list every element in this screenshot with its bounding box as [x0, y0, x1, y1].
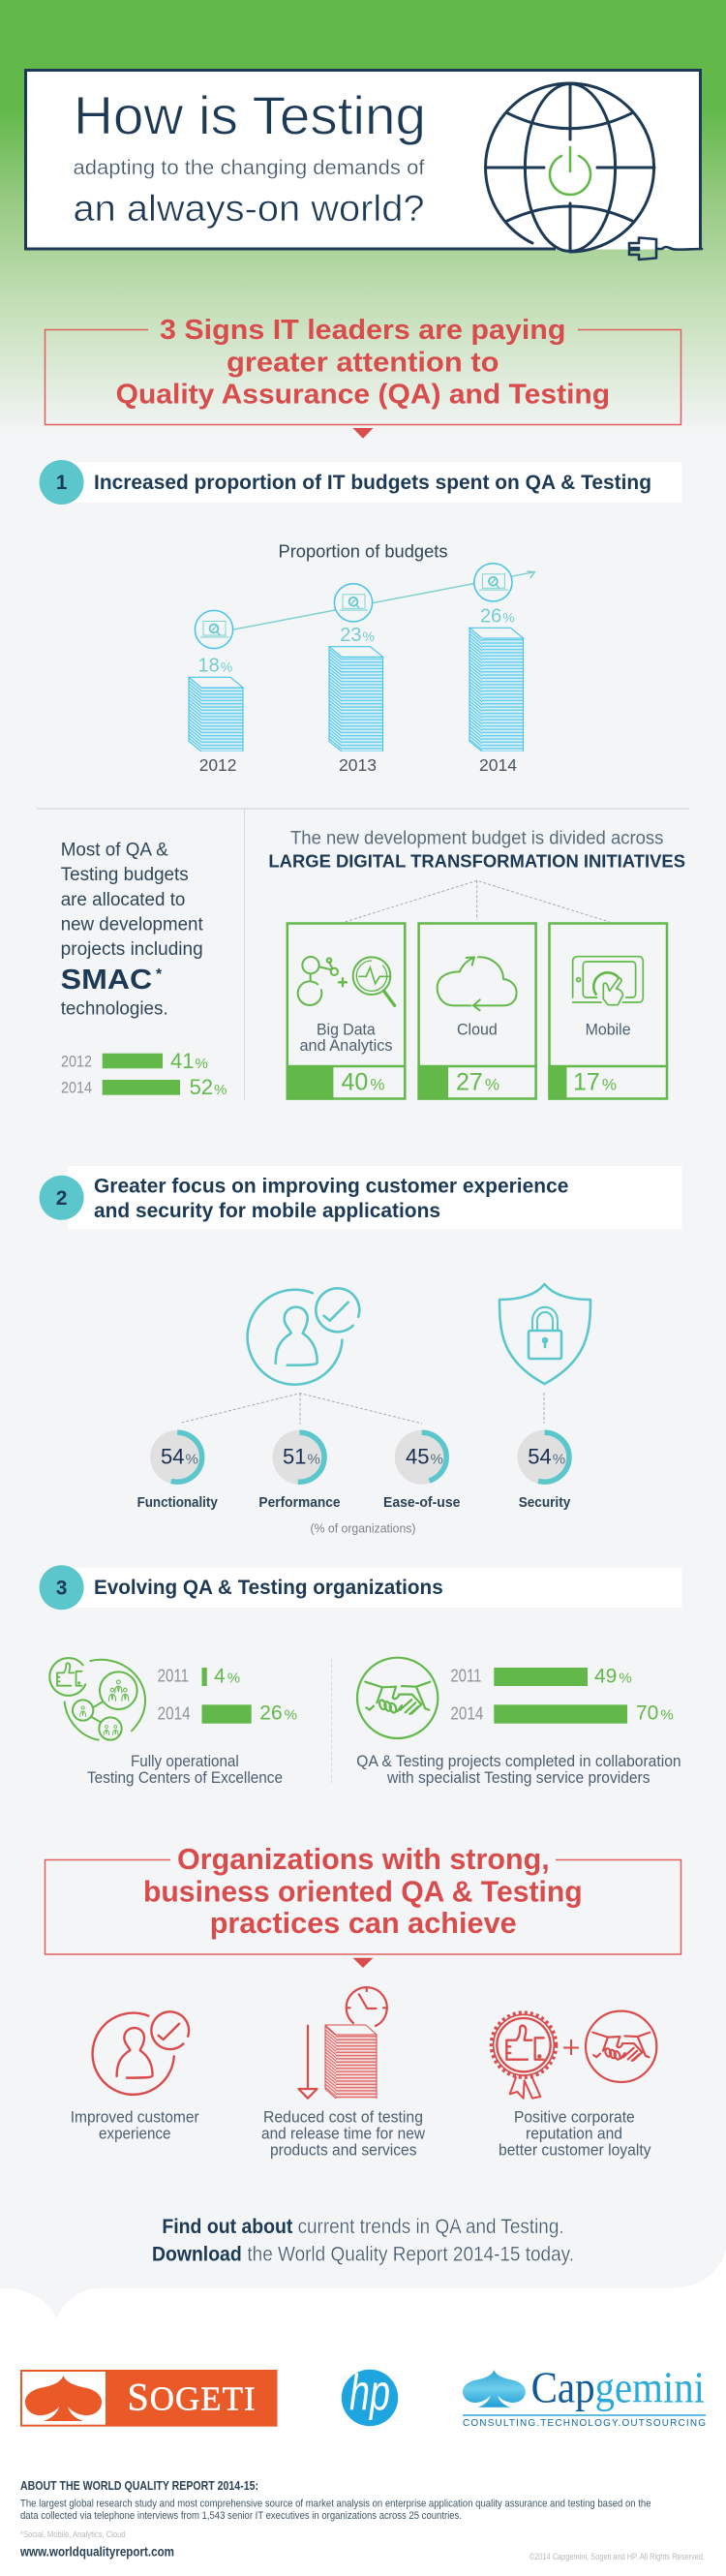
panel: organizations callout — [45, 1842, 681, 1968]
logo: Sogeti: SOGETI — [128, 2376, 257, 2419]
text block: SMAC allocation — [61, 840, 203, 1020]
panel: Big Data and Analytics: Big Data — [317, 1020, 376, 1038]
caption: reduced cost: products and services — [270, 2141, 416, 2160]
donut: performance 51%: 51% — [283, 1445, 320, 1469]
caption: corporate reputation: better customer loyalty — [499, 2141, 651, 2160]
heading: 3 signs: Quality Assurance (QA) and Testing — [116, 380, 610, 411]
icon: handshake red — [586, 2011, 656, 2082]
donut: ease-of-use 45% — [395, 1430, 449, 1485]
panel: section 2 header — [40, 1166, 682, 1229]
icon: plug and cord — [629, 238, 702, 260]
caption: improved customer experience: experience — [99, 2124, 170, 2142]
caption: corporate reputation: reputation and — [526, 2124, 622, 2142]
heading: development budget: LARGE DIGITAL TRANSFORMATION INITIATIVES — [268, 851, 685, 871]
note: percent of organizations: (% of organizations) — [310, 1522, 416, 1536]
title line 1: How is Testing — [74, 85, 426, 145]
heading: organizations: practices can achieve — [210, 1906, 517, 1940]
title line 3: an always-on world? — [74, 189, 424, 230]
donut labels: Ease-of-use — [383, 1494, 460, 1511]
caption: reduced cost: and release time for new — [261, 2124, 426, 2142]
year labels: 2012 — [199, 755, 236, 775]
bar chart: SMAC share: 2014 — [61, 1078, 92, 1096]
stack 2012 — [189, 677, 243, 751]
icon: customer with check — [248, 1288, 359, 1385]
panel: Big Data and Analytics — [287, 924, 407, 1100]
panel: Big Data and Analytics: 40% — [341, 1068, 384, 1095]
icon: cloud — [438, 957, 517, 1010]
donut labels: Security — [519, 1494, 571, 1511]
text block: SMAC allocation: SMAC — [61, 965, 152, 996]
logo: Capgemini: gemini — [595, 2362, 705, 2411]
heading: organizations: business oriented QA & Testing — [143, 1874, 583, 1908]
caption: improved customer experience — [71, 2108, 199, 2142]
title line 2: adapting to the changing demands of — [74, 157, 425, 179]
year labels: 2013 — [339, 755, 377, 775]
icon: shield with padlock — [499, 1284, 590, 1384]
text block: about the report — [20, 2478, 650, 2522]
heading: 3 signs: greater attention to — [227, 347, 499, 378]
bar chart: collaboration: 70% — [636, 1702, 674, 1725]
text block: SMAC allocation: are allocated to — [61, 890, 185, 910]
caption: testing centers — [87, 1752, 283, 1787]
text block: SMAC allocation: * — [156, 966, 163, 983]
icon: laptop 2014 — [474, 564, 512, 601]
panel: section 2 header: 2 — [56, 1187, 67, 1210]
heading: development budget — [268, 829, 685, 871]
text block: about the report: The largest global research study and most comprehensive source of market analysis on enterprise application quality assurance and testing based on the — [20, 2498, 650, 2509]
panel: Cloud: Cloud — [457, 1020, 498, 1038]
panel: section 2 header: Greater focus on improving customer experience — [94, 1176, 568, 1198]
donut labels — [137, 1494, 571, 1511]
donut: security 54% — [517, 1430, 571, 1485]
dividers — [37, 808, 689, 810]
call to action — [152, 2216, 574, 2265]
green header gradient — [0, 0, 726, 436]
donut labels: Functionality — [137, 1494, 218, 1511]
bar chart: SMAC share: 41% — [170, 1049, 208, 1073]
donut: performance 51% — [273, 1430, 327, 1485]
dashed connectors — [182, 1393, 544, 1425]
caption: improved customer experience: Improved customer — [71, 2108, 199, 2127]
caption: reduced cost — [261, 2108, 426, 2160]
arrow: trend line — [234, 571, 534, 629]
value 23%: 23% — [340, 625, 375, 646]
bar chart: collaboration: 2011 — [450, 1667, 481, 1686]
bar chart: testing centers: 26% — [259, 1702, 297, 1725]
panel: Cloud: 27% — [456, 1068, 499, 1095]
caption: testing centers: Testing Centers of Excellence — [87, 1768, 283, 1787]
call to action: current trends in QA and Testing. — [298, 2216, 564, 2238]
website link text: www.worldqualityreport.com — [19, 2543, 174, 2559]
logo: Capgemini: CONSULTING.TECHNOLOGY.OUTSOURCING — [463, 2418, 706, 2429]
icon: testing centers of excellence — [49, 1658, 145, 1740]
call to action: the World Quality Report 2014-15 today. — [247, 2243, 574, 2265]
dashed connectors — [345, 880, 610, 922]
caption: testing centers: Fully operational — [131, 1752, 239, 1770]
icon: plus — [563, 2039, 579, 2055]
panel: Mobile — [548, 924, 668, 1100]
bar chart: SMAC share — [61, 1049, 227, 1099]
year labels — [199, 755, 517, 775]
bar chart: collaboration: 49% — [594, 1665, 632, 1687]
icon: improved customer experience — [93, 2011, 189, 2095]
caption: corporate reputation — [499, 2108, 651, 2160]
bar chart: testing centers: 4% — [214, 1665, 240, 1687]
panel: Mobile: 17% — [573, 1068, 617, 1095]
bar chart: collaboration — [450, 1665, 674, 1725]
donut: security 54%: 54% — [528, 1445, 565, 1469]
panel: section 1 header: Increased proportion of IT budgets spent on QA & Testing — [94, 472, 651, 494]
chart title: Proportion of budgets — [279, 541, 447, 562]
logo: Capgemini — [463, 2362, 706, 2429]
bar chart: collaboration: 2014 — [450, 1704, 483, 1724]
icon: tablet with hand — [573, 957, 643, 1005]
panel: title banner — [25, 70, 702, 260]
icon: clock, stack and down arrow — [298, 1987, 387, 2099]
panel: section 1 header — [40, 460, 682, 505]
panel: Mobile: Mobile — [586, 1020, 631, 1038]
donut: ease-of-use 45%: 45% — [406, 1445, 443, 1469]
panel: section 2 header: and security for mobile applications — [94, 1200, 440, 1222]
text block: SMAC allocation: new development — [61, 915, 203, 935]
value 26%: 26% — [480, 606, 515, 628]
donut: functionality 54% — [150, 1430, 204, 1485]
heading: development budget: The new development budget is divided across — [290, 829, 663, 849]
heading: organizations: Organizations with strong, — [177, 1842, 550, 1876]
bar chart: testing centers: 2014 — [158, 1704, 191, 1724]
stack 2014 — [469, 628, 523, 751]
logo: Sogeti — [20, 2370, 277, 2427]
logo: HP: hp — [349, 2365, 390, 2421]
call to action: Find out about — [162, 2216, 292, 2238]
bar chart: SMAC share: 2012 — [61, 1053, 92, 1071]
caption: corporate reputation: Positive corporate — [514, 2108, 635, 2127]
arrow: callout pointer — [352, 428, 374, 439]
text block: about the report: data collected via telephone interviews from 1,543 senior IT executives in organizations across 25 countries. — [20, 2510, 462, 2522]
footnote: *Social, Mobile, Analytics, Cloud — [20, 2530, 126, 2540]
caption: reduced cost: Reduced cost of testing — [263, 2108, 423, 2127]
panel: section 3 header: Evolving QA & Testing organizations — [94, 1577, 443, 1599]
caption: collaboration — [356, 1752, 681, 1787]
donut labels: Performance — [258, 1494, 341, 1511]
heading: organizations — [143, 1842, 583, 1940]
bar chart: testing centers — [158, 1665, 297, 1725]
icon: reputation badge — [492, 2013, 556, 2099]
icon: handshake — [357, 1658, 438, 1738]
panel: section 1 header: 1 — [56, 472, 68, 494]
chart: proportion of budgets — [189, 541, 534, 775]
bar chart: testing centers: 2011 — [158, 1667, 189, 1686]
logo: Capgemini: Cap — [531, 2362, 595, 2411]
call to action: Download — [152, 2243, 242, 2265]
value 18%: 18% — [197, 655, 232, 676]
text block: SMAC allocation: technologies. — [61, 999, 168, 1020]
bar chart: SMAC share: 52% — [190, 1075, 227, 1099]
panel: section 3 header — [40, 1565, 682, 1610]
stack 2013 — [329, 647, 383, 751]
panel: 3 signs callout — [45, 315, 681, 439]
heading: 3 signs: 3 Signs IT leaders are paying — [160, 315, 565, 346]
text block: SMAC allocation: projects including — [61, 939, 203, 960]
text block: SMAC allocation: Most of QA & — [61, 840, 168, 860]
caption: collaboration: with specialist Testing service providers — [386, 1768, 650, 1787]
panel: Cloud — [417, 924, 537, 1100]
heading: 3 signs — [116, 315, 610, 411]
arrow: callout pointer — [352, 1958, 374, 1968]
text block: about the report: ABOUT THE WORLD QUALITY REPORT 2014-15: — [20, 2478, 258, 2493]
donut: functionality 54%: 54% — [161, 1445, 198, 1469]
panel: section 3 header: 3 — [56, 1577, 67, 1600]
icon: laptop 2012 — [195, 610, 233, 649]
icon: globe with power symbol — [486, 83, 654, 252]
icon: laptop 2013 — [334, 584, 373, 622]
panel: Big Data and Analytics: and Analytics — [300, 1036, 393, 1055]
text block: SMAC allocation: Testing budgets — [61, 865, 189, 885]
icon: big data and magnifier — [298, 957, 395, 1005]
caption: collaboration: QA & Testing projects completed in collaboration — [356, 1752, 681, 1770]
year labels: 2014 — [479, 755, 517, 775]
